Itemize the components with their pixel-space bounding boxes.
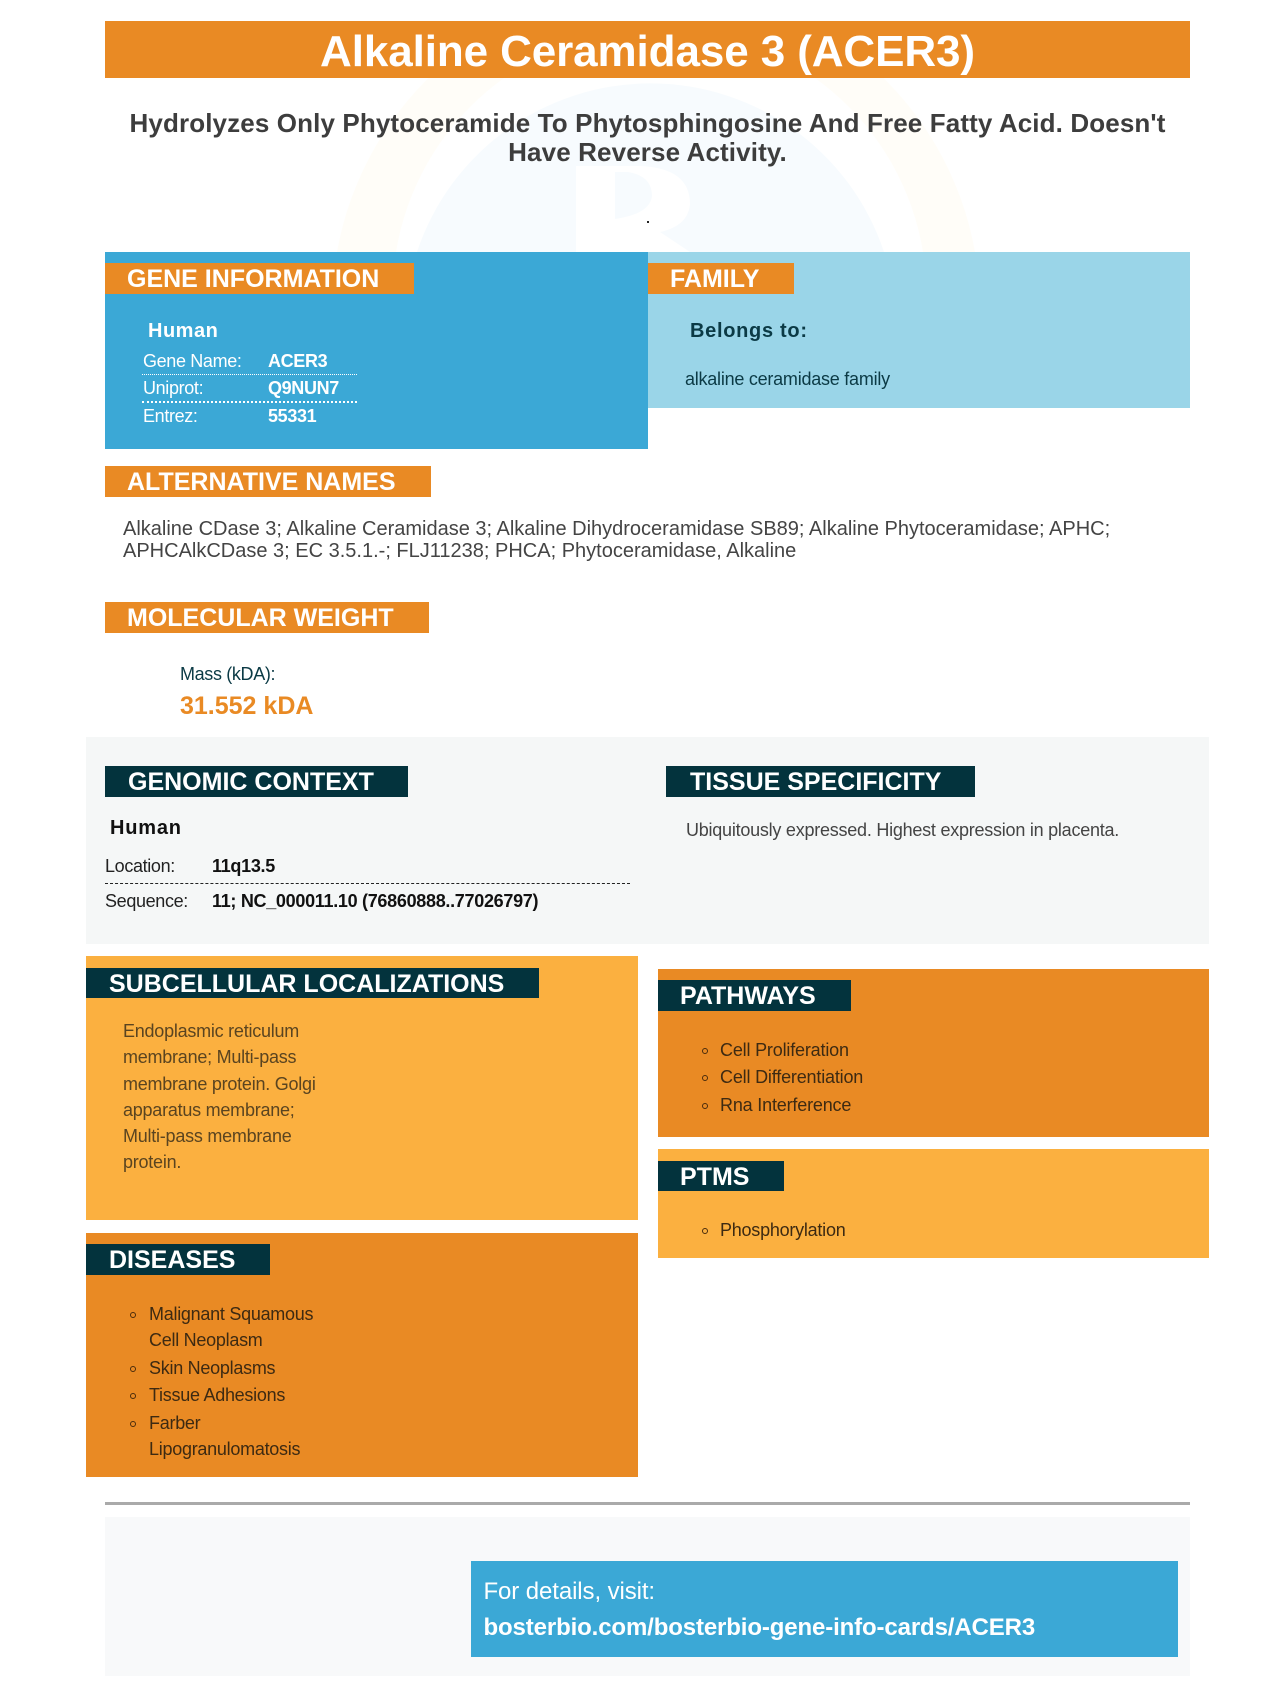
pathway item: Cell Differentiation bbox=[720, 1067, 863, 1087]
heading: alternative names: ALTERNATIVE NAMES bbox=[127, 468, 396, 496]
panel: family bbox=[648, 252, 1190, 408]
disease item: Malignant Squamous bbox=[149, 1304, 313, 1324]
panel: ptms bbox=[658, 1149, 1209, 1258]
panel: gene information bbox=[105, 252, 648, 449]
ptm item: Phosphorylation bbox=[720, 1220, 846, 1240]
panel: subcellular localizations bbox=[86, 956, 638, 1220]
species label: Human bbox=[148, 320, 218, 342]
row: location: 11q13.5 bbox=[212, 856, 275, 876]
row: entrez bbox=[143, 406, 316, 426]
row: gene name: Gene Name: bbox=[143, 351, 242, 371]
localization text bbox=[123, 1021, 316, 1172]
localization text: membrane; Multi-pass bbox=[123, 1047, 296, 1067]
heading: molecular weight: MOLECULAR WEIGHT bbox=[127, 604, 394, 632]
footer divider bbox=[105, 1502, 1190, 1505]
localization text: membrane protein. Golgi bbox=[123, 1074, 316, 1094]
panel: pathways bbox=[658, 969, 1209, 1137]
panel: diseases bbox=[86, 1233, 638, 1477]
background watermark logo bbox=[0, 78, 1288, 252]
callout label: For details, visit: bbox=[484, 1578, 655, 1605]
callout: details link bbox=[471, 1561, 1178, 1657]
localization text: Endoplasmic reticulum bbox=[123, 1021, 299, 1041]
title: Alkaline Ceramidase 3 (ACER3) bbox=[320, 27, 975, 76]
panel: footer bbox=[105, 1517, 1190, 1676]
heading: pathways bbox=[658, 980, 851, 1011]
belongs to label: Belongs to: bbox=[690, 320, 808, 342]
row: entrez: 55331 bbox=[268, 406, 316, 426]
row: entrez: Entrez: bbox=[143, 406, 198, 426]
row: gene name: ACER3 bbox=[268, 351, 327, 371]
row: uniprot: Q9NUN7 bbox=[268, 378, 339, 398]
heading: pathways: PATHWAYS bbox=[680, 982, 816, 1010]
subtitle: Have Reverse Activity. bbox=[508, 137, 787, 167]
alternative names text: APHCAlkCDase 3; EC 3.5.1.-; FLJ11238; PHCA; Phytoceramidase, Alkaline bbox=[123, 540, 796, 562]
localization text: protein. bbox=[123, 1152, 181, 1172]
title bbox=[105, 21, 1190, 78]
subtitle: Hydrolyzes Only Phytoceramide To Phytosphingosine And Free Fatty Acid. Doesn't bbox=[130, 108, 1165, 138]
disease item: Farber bbox=[149, 1413, 200, 1433]
row: sequence: Sequence: bbox=[105, 891, 188, 911]
heading: gene information: GENE INFORMATION bbox=[127, 265, 379, 293]
disease item: Cell Neoplasm bbox=[149, 1330, 263, 1350]
localization text: Multi-pass membrane bbox=[123, 1126, 292, 1146]
heading: subcellular localizations: SUBCELLULAR LOCALIZATIONS bbox=[109, 970, 504, 998]
callout url: bosterbio.com/bosterbio-gene-info-cards/ACER3 bbox=[484, 1614, 1035, 1641]
row: uniprot: Uniprot: bbox=[143, 378, 203, 398]
alternative names text: Alkaline CDase 3; Alkaline Ceramidase 3; Alkaline Dihydroceramidase SB89; Alkaline Phytoceramidase; APHC; bbox=[123, 518, 1110, 540]
alternative names text bbox=[123, 518, 1110, 562]
disease item: Tissue Adhesions bbox=[149, 1385, 285, 1405]
heading: ptms: PTMS bbox=[680, 1163, 749, 1191]
tissue specificity text: Ubiquitously expressed. Highest expression in placenta. bbox=[686, 820, 1119, 840]
row: gene name bbox=[142, 351, 357, 375]
pathway item: Cell Proliferation bbox=[720, 1040, 849, 1060]
row: sequence: 11; NC_000011.10 (76860888..77026797) bbox=[212, 891, 538, 911]
family value: alkaline ceramidase family bbox=[685, 369, 890, 389]
disease item: Lipogranulomatosis bbox=[149, 1439, 300, 1459]
mass value: 31.552 kDA bbox=[180, 692, 313, 720]
small dot bbox=[647, 221, 649, 223]
subtitle bbox=[130, 108, 1166, 167]
pathway item: Rna Interference bbox=[720, 1095, 851, 1115]
row: uniprot bbox=[142, 378, 357, 403]
heading: family bbox=[648, 263, 794, 294]
row: location: Location: bbox=[105, 856, 175, 876]
localization text: apparatus membrane; bbox=[123, 1100, 295, 1120]
mass label: Mass (kDA): bbox=[180, 664, 275, 684]
row: location bbox=[105, 855, 630, 884]
heading: diseases bbox=[86, 1244, 270, 1275]
heading: diseases: DISEASES bbox=[109, 1246, 235, 1274]
disease item bbox=[130, 1304, 313, 1350]
heading: family: FAMILY bbox=[670, 265, 759, 293]
disease item: Skin Neoplasms bbox=[149, 1358, 275, 1378]
heading: genomic context: GENOMIC CONTEXT bbox=[128, 768, 374, 796]
disease item bbox=[130, 1413, 300, 1459]
genomic species label: Human bbox=[110, 817, 182, 839]
heading: tissue specificity: TISSUE SPECIFICITY bbox=[690, 768, 941, 796]
heading: ptms bbox=[658, 1161, 784, 1191]
panel: genomic context and tissue specificity bbox=[86, 737, 1209, 944]
